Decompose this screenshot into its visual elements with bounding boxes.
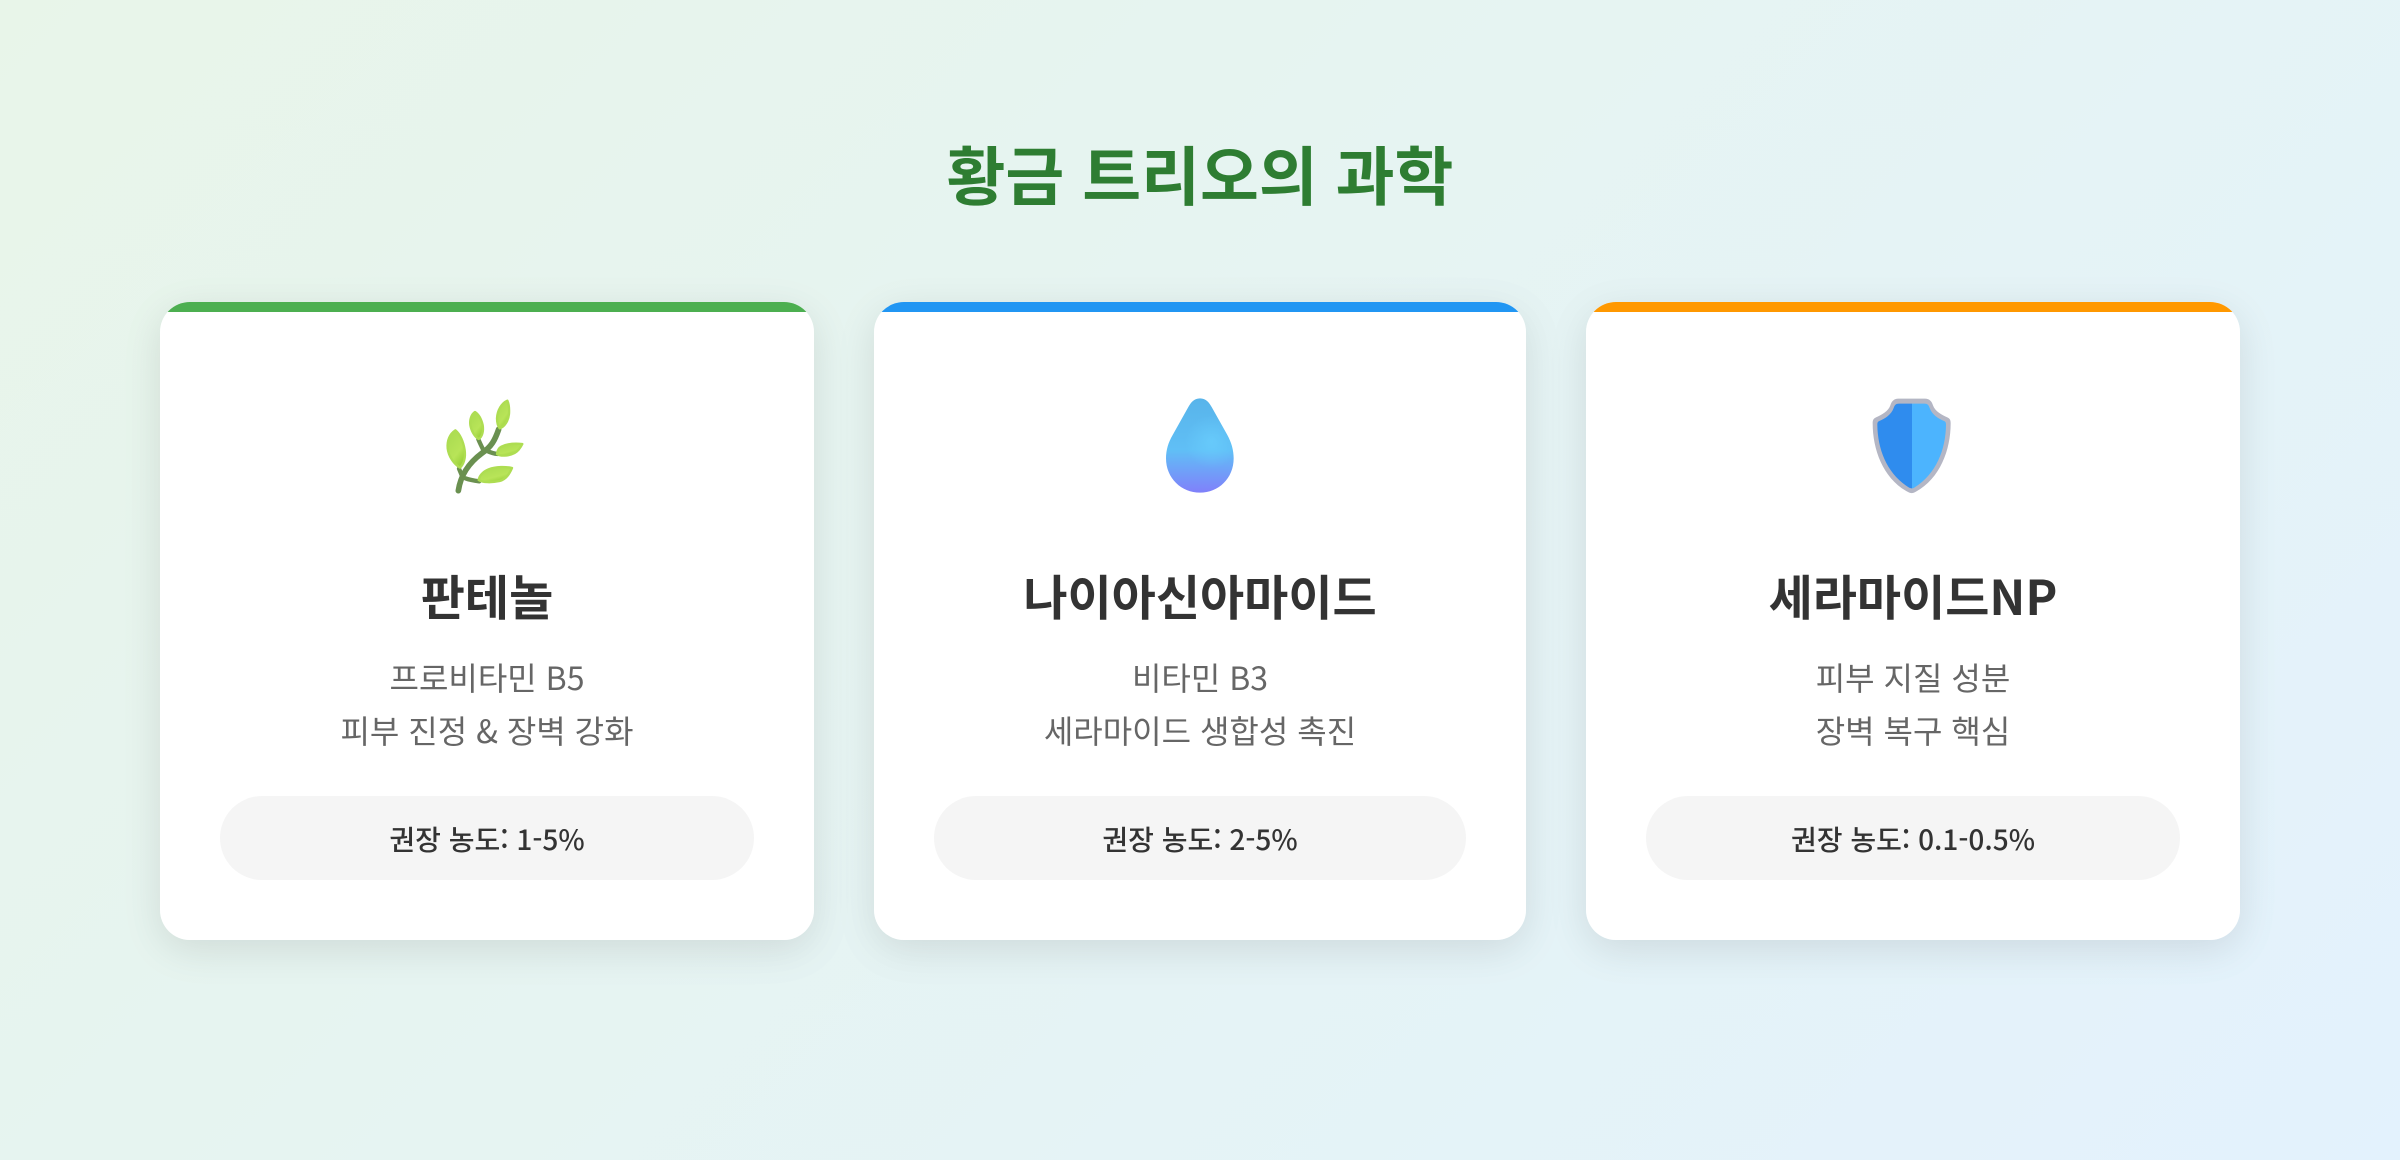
title: 황금 트리오의 과학 — [947, 127, 1453, 219]
ingredient name: 나이아신아마이드 — [1023, 559, 1377, 629]
description: 프로비타민 B5 — [390, 654, 584, 700]
icon: herb leaf — [446, 400, 524, 494]
concentration pill: 권장 농도: 1-5% — [389, 819, 585, 859]
concentration pill: 권장 농도: 2-5% — [1102, 819, 1298, 859]
top accent bar: green — [160, 302, 814, 312]
ingredient name: 세라마이드NP — [1769, 559, 2057, 629]
description — [1816, 654, 2010, 753]
panel: 세라마이드NP — [1586, 302, 2240, 940]
description — [340, 654, 634, 753]
ingredient name: 판테놀 — [421, 559, 553, 629]
icon: water drop — [1166, 398, 1234, 493]
description: 피부 지질 성분 — [1816, 654, 2010, 700]
panel: 나이아신아마이드 — [874, 302, 1526, 940]
description: 장벽 복구 핵심 — [1816, 707, 2010, 753]
description — [1044, 654, 1356, 753]
icon: shield — [1872, 398, 1951, 494]
top accent bar: orange — [1586, 302, 2240, 312]
concentration pill — [220, 796, 754, 880]
description: 세라마이드 생합성 촉진 — [1044, 707, 1356, 753]
concentration pill — [934, 796, 1466, 880]
panel: 판테놀 — [160, 302, 814, 940]
top accent bar: blue — [874, 302, 1526, 312]
concentration pill — [1646, 796, 2180, 880]
description: 피부 진정 & 장벽 강화 — [340, 707, 634, 753]
description: 비타민 B3 — [1132, 654, 1268, 700]
concentration pill: 권장 농도: 0.1-0.5% — [1791, 819, 2035, 859]
